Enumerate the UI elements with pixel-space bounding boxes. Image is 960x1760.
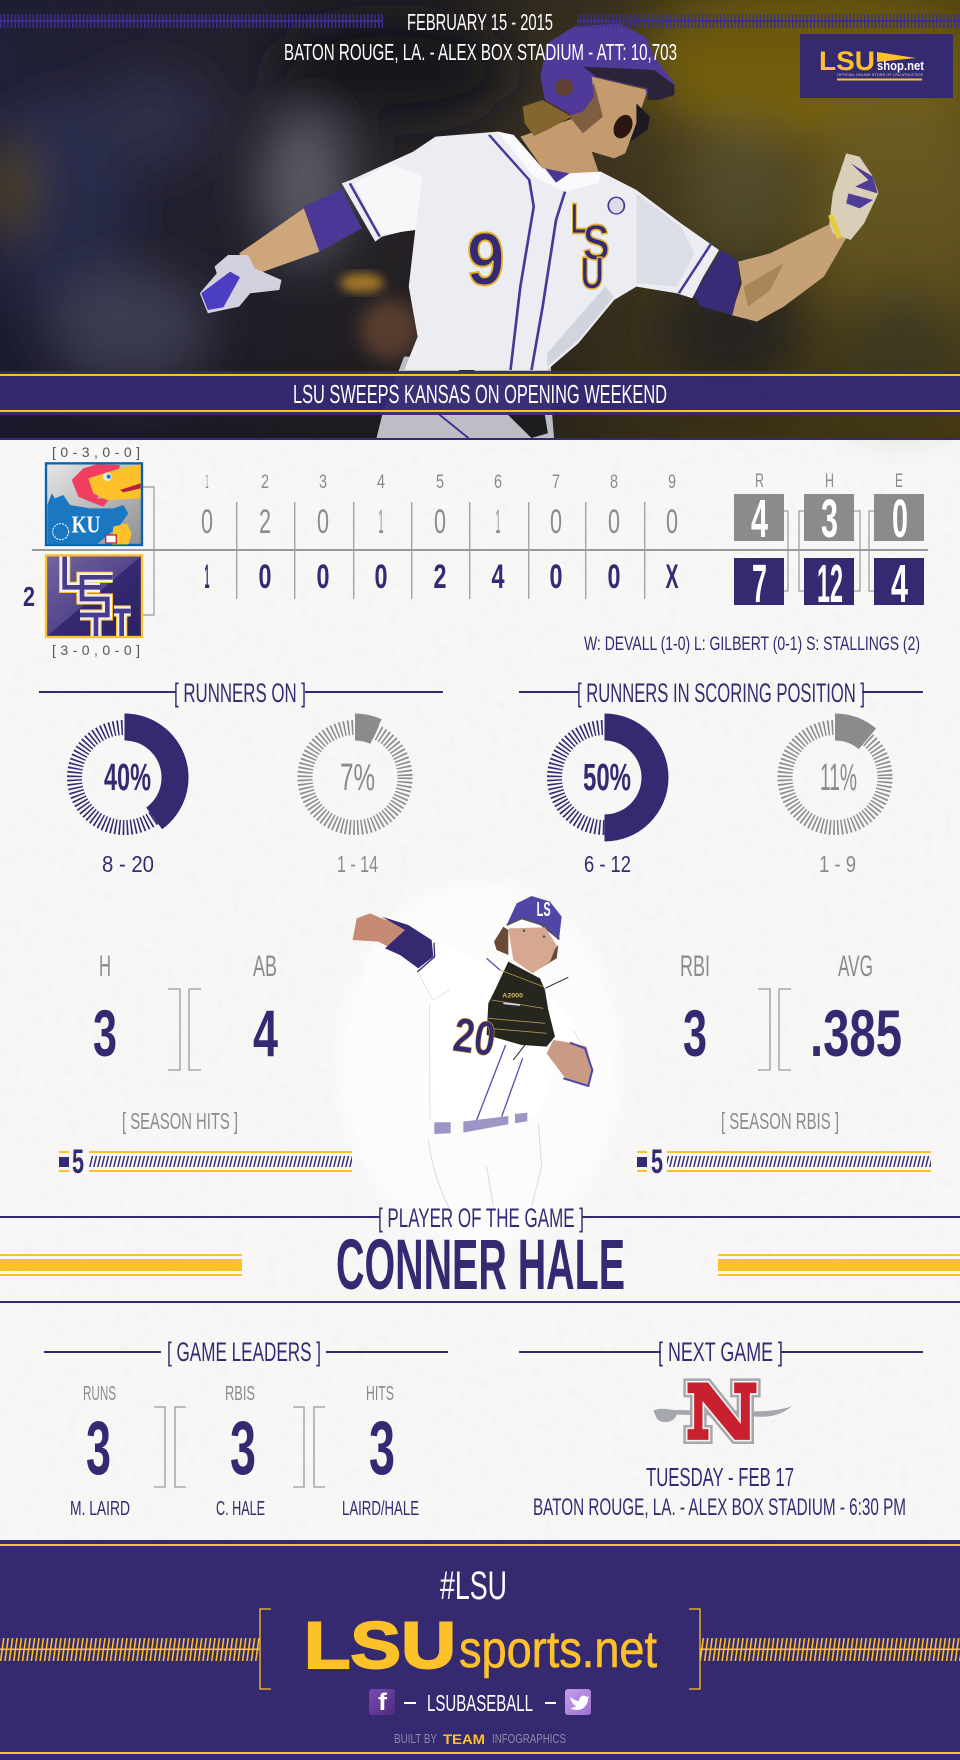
- panel: player stats right: [637, 950, 931, 1181]
- Kansas innings: 2: [259, 503, 271, 541]
- stat values: [93, 996, 278, 1070]
- connectors: [143, 487, 874, 615]
- LSU shop logo: LSU: [819, 46, 875, 76]
- leader labels: RBIS: [225, 1383, 255, 1405]
- leader labels: HITS: [366, 1383, 394, 1405]
- inning headers: 3: [319, 472, 327, 493]
- panel: line score: [23, 444, 928, 658]
- panel: game leaders: [44, 1337, 448, 1520]
- LSU RHE boxes: 7: [752, 554, 767, 614]
- inning headers: 6: [494, 472, 502, 493]
- record: Kansas: [0-3,0-0]: [52, 444, 140, 460]
- LSU innings: 1: [204, 558, 210, 596]
- sleeve: [382, 917, 433, 968]
- game marker: 2: [23, 581, 35, 612]
- RHE headers: H: [825, 471, 834, 492]
- brackets: [168, 989, 201, 1070]
- Kansas RHE boxes: [734, 489, 924, 549]
- forearm: [547, 1040, 592, 1087]
- RHE headers: R: [755, 471, 764, 492]
- Kansas innings: [201, 503, 678, 541]
- donut: LSU 50%: 6 - 12: [584, 851, 631, 877]
- LSUsports.net logo: sports.net: [459, 1621, 657, 1679]
- Kansas RHE boxes: 0: [892, 489, 908, 549]
- credit: INFOGRAPHICS: [492, 1731, 566, 1746]
- jersey lettering: L: [571, 194, 587, 243]
- top date line: BATON ROUGE, LA. - ALEX BOX STADIUM - ATT: 10,703: [284, 39, 677, 65]
- glove: [487, 962, 555, 1047]
- donut: Kansas 11%: 11%: [820, 757, 857, 799]
- jersey lettering: U: [581, 249, 604, 298]
- leader names: [70, 1498, 419, 1520]
- LSU shop logo: shop.net: [877, 58, 925, 73]
- donut: LSU 40%: [74, 713, 189, 877]
- inning headers: 1: [206, 472, 208, 493]
- inning headers: 5: [436, 472, 444, 493]
- stat values: 3: [683, 996, 707, 1070]
- record: LSU: [3-0,0-0]: [52, 642, 140, 658]
- inning headers: 8: [610, 472, 618, 493]
- inning headers: 7: [552, 472, 560, 493]
- batter photo: pants: [377, 357, 554, 438]
- helmet: [540, 23, 674, 115]
- Kansas innings: 0: [434, 503, 446, 541]
- next game date: TUESDAY - FEB 17: [646, 1462, 794, 1492]
- left arm: [239, 208, 319, 274]
- face: [508, 927, 557, 973]
- heading: [ GAME LEADERS ]: [167, 1337, 321, 1367]
- panel: runners on: [39, 678, 443, 877]
- hash bands: [0, 1638, 960, 1661]
- leader values: 3: [86, 1406, 111, 1491]
- donut: Kansas 7%: 1 - 14: [337, 851, 378, 877]
- stat values: .385: [810, 996, 902, 1070]
- hashtag: #LSU: [440, 1564, 507, 1608]
- neck and face: [520, 77, 648, 174]
- headline banner: [0, 371, 960, 415]
- LSU RHE boxes: [734, 554, 924, 614]
- stat labels: H: [99, 950, 111, 983]
- batting glove left: [200, 255, 282, 313]
- hair: [523, 100, 572, 136]
- season rbis bar: [637, 1143, 931, 1181]
- Kansas innings: 1: [496, 503, 500, 541]
- donut: LSU 50%: 50%: [583, 757, 631, 799]
- leader values: 3: [230, 1406, 256, 1491]
- LSU innings: 0: [374, 558, 388, 596]
- stat labels: AVG: [838, 950, 873, 983]
- LSU innings: 4: [492, 558, 505, 596]
- Kansas innings: 0: [201, 503, 213, 541]
- leader labels: [83, 1383, 394, 1405]
- hair: [494, 927, 558, 968]
- collar: [543, 168, 569, 183]
- batter photo: figure: [200, 23, 878, 370]
- season hits label: [ SEASON HITS ]: [122, 1108, 238, 1134]
- LSUsports.net logo: LSU: [304, 1608, 456, 1682]
- logo: LSU: [46, 555, 142, 637]
- Kansas innings: 0: [550, 503, 562, 541]
- social row: [369, 1689, 591, 1716]
- LSU innings: 0: [258, 558, 272, 596]
- jersey: [415, 942, 587, 1123]
- blurred stadium background: [0, 0, 960, 438]
- rule: [32, 549, 928, 551]
- icon: facebook: [369, 1689, 395, 1716]
- panel: footer: [0, 1540, 960, 1760]
- heading: [ RUNNERS ON ]: [174, 678, 306, 708]
- stat labels: RBI: [680, 950, 710, 983]
- Kansas innings: 1: [378, 503, 384, 541]
- brackets: [154, 1407, 325, 1487]
- stat labels: [99, 950, 277, 983]
- LSU RHE boxes: 4: [891, 554, 908, 614]
- batting glove right: [829, 153, 878, 240]
- leader names: LAIRD/HALE: [342, 1498, 419, 1520]
- photo: pitcher: A2000: [502, 992, 523, 999]
- Kansas RHE boxes: 3: [821, 489, 838, 549]
- season hits bar: [59, 1143, 352, 1181]
- inning headers: [206, 472, 676, 493]
- donut: LSU 40%: 40%: [104, 757, 151, 799]
- belt: [434, 1113, 527, 1134]
- heading: [ PLAYER OF THE GAME ]: [378, 1203, 584, 1233]
- leader names: M. LAIRD: [70, 1498, 130, 1520]
- season hits bar: 5: [72, 1143, 84, 1181]
- LSU innings: 0: [316, 558, 330, 596]
- LSU innings: X: [666, 558, 679, 596]
- credit: BUILT BY: [394, 1731, 437, 1746]
- piping: [350, 135, 711, 370]
- Kansas innings: 0: [608, 503, 620, 541]
- leader values: [86, 1406, 395, 1491]
- leader names: C. HALE: [216, 1498, 265, 1520]
- logo: Nicholls: [653, 1382, 792, 1441]
- white glow: [340, 883, 620, 1243]
- photo: pitcher: [340, 883, 620, 1243]
- logo: Kansas Jayhawk: KU: [72, 512, 100, 538]
- stat values: 3: [93, 996, 117, 1070]
- brackets: [758, 989, 791, 1070]
- RHE headers: [755, 471, 903, 492]
- inning headers: 4: [377, 472, 385, 493]
- panel: player stats left: [59, 950, 352, 1181]
- photo: pitcher: LS: [537, 899, 551, 921]
- inning headers: 9: [668, 472, 676, 493]
- gold stripes: [0, 1254, 960, 1276]
- RHE headers: E: [895, 471, 903, 492]
- top date line: [0, 9, 960, 65]
- player name: CONNER HALE: [336, 1226, 625, 1305]
- stat values: 4: [253, 996, 278, 1070]
- dash and handle: LSUBASEBALL: [427, 1690, 533, 1716]
- panel: runners in scoring position: [519, 678, 923, 877]
- credit: [394, 1731, 566, 1747]
- jersey number: 20: [450, 1008, 499, 1067]
- icon: facebook: f: [378, 1689, 388, 1716]
- piping: [477, 958, 523, 1120]
- jersey lettering: [571, 194, 610, 298]
- heading: [ NEXT GAME ]: [658, 1337, 783, 1367]
- right arm: [731, 223, 847, 322]
- SEC patch: [608, 197, 624, 214]
- donut: Kansas 11%: 1 - 9: [819, 851, 856, 877]
- donut: Kansas 11%: [785, 714, 885, 877]
- Kansas innings: 0: [317, 503, 329, 541]
- LSU innings: [204, 558, 679, 596]
- leader values: 3: [369, 1406, 395, 1491]
- jersey: [342, 132, 719, 370]
- LSUsports.net logo: [304, 1608, 657, 1682]
- panel: hero photo: [0, 0, 960, 440]
- leader labels: RUNS: [83, 1383, 116, 1405]
- panel: next game: [519, 1337, 923, 1521]
- LSU innings: 2: [434, 558, 446, 596]
- LSU innings: 0: [550, 558, 562, 596]
- top date line: FEBRUARY 15 - 2015: [407, 9, 553, 35]
- inning headers: 2: [261, 472, 269, 493]
- donut: Kansas 7%: 7%: [340, 757, 375, 799]
- stat values: [683, 996, 902, 1070]
- headline banner: LSU SWEEPS KANSAS ON OPENING WEEKEND: [293, 379, 667, 409]
- season rbis bar: 5: [651, 1143, 663, 1181]
- Kansas innings: 0: [666, 503, 678, 541]
- LSU shop logo: OFFICIAL ONLINE STORE OF LSU ATHLETICS: [837, 73, 924, 77]
- logo brackets: [260, 1609, 700, 1689]
- logo: Kansas Jayhawk: [46, 463, 142, 545]
- LSU RHE boxes: 12: [817, 554, 843, 614]
- fist: [353, 913, 407, 949]
- stat labels: AB: [253, 950, 277, 983]
- icon: twitter: [565, 1689, 591, 1715]
- panel: player of the game: [0, 1203, 960, 1305]
- LSU innings: 0: [608, 558, 620, 596]
- jersey lettering: S: [583, 214, 610, 270]
- donut: LSU 40%: 8 - 20: [102, 851, 154, 877]
- LSU shop logo: [800, 34, 953, 98]
- donut: Kansas 7%: [305, 714, 405, 877]
- purple sleeves: [304, 189, 362, 252]
- jersey number: 9: [467, 217, 505, 301]
- stat labels: [680, 950, 873, 983]
- season rbis label: [ SEASON RBIS ]: [721, 1108, 839, 1134]
- credit: TEAM: [443, 1731, 485, 1747]
- cap: [507, 896, 562, 940]
- donut: LSU 50%: [554, 714, 668, 877]
- Kansas RHE boxes: 4: [751, 489, 768, 549]
- pants outline: [428, 1123, 542, 1210]
